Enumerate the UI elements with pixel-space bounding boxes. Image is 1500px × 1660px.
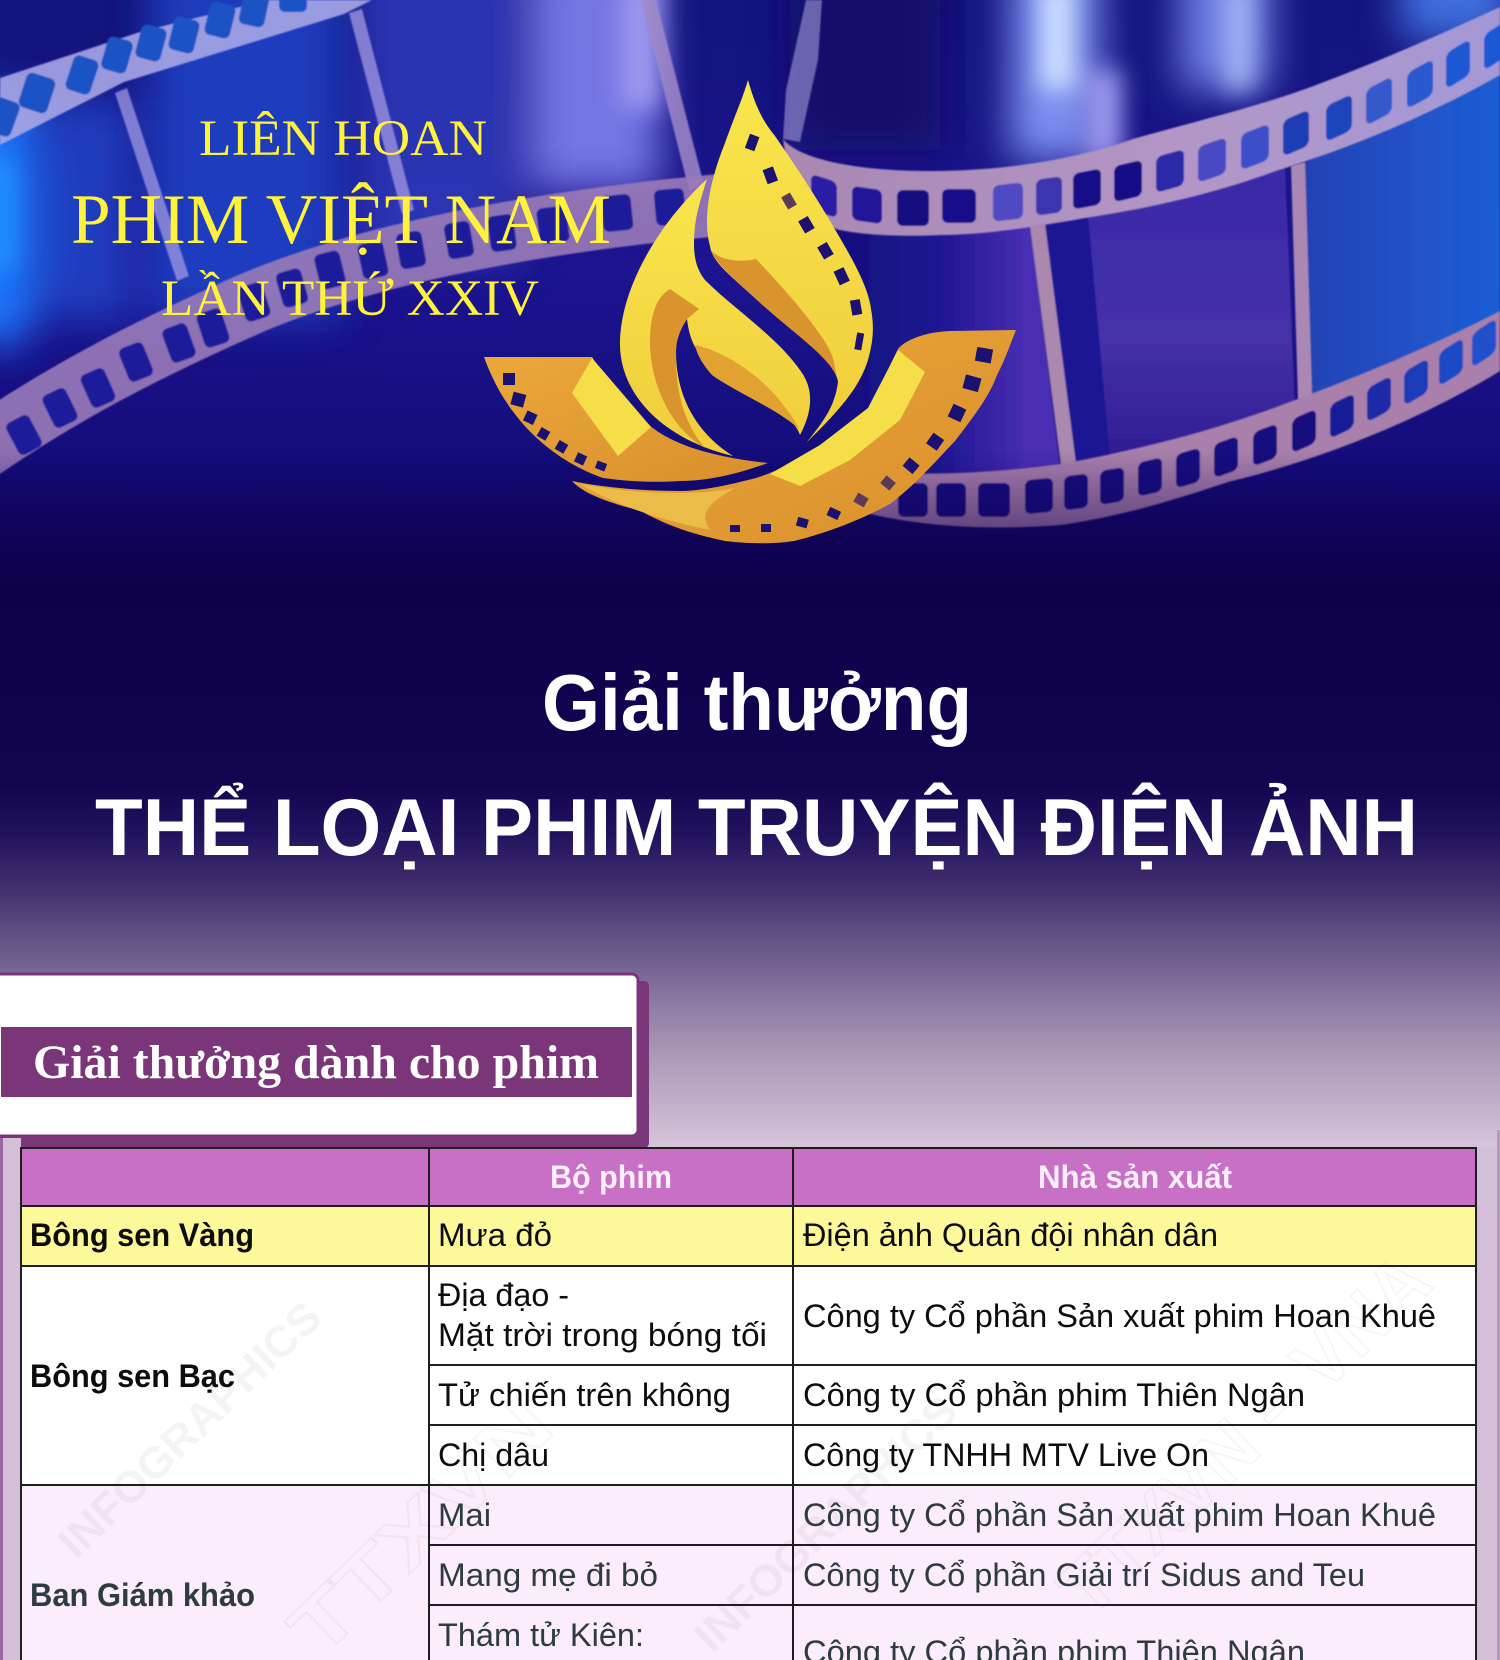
row: Bông sen Vàng: Điện ảnh Quân đội nhân dân: [803, 1217, 1218, 1253]
festival name: PHIM VIỆT NAM: [71, 181, 611, 259]
table header: Nhà sản xuất: [1038, 1159, 1232, 1195]
row: Ban Giám khảo: Ban Giám khảo: [30, 1577, 255, 1613]
row: Bông sen Bạc: Tử chiến trên không: [438, 1377, 731, 1413]
festival name: [71, 111, 611, 327]
centre leaf orange: [695, 345, 800, 430]
right leaf orange band: [711, 250, 838, 382]
row: Bông sen Bạc: Chị dâu: [438, 1437, 549, 1473]
watermark: TTXVN – VNA: [1043, 1238, 1447, 1632]
festival name: LIÊN HOAN: [199, 111, 487, 167]
film strip: right upper band: [783, 7, 1500, 236]
row: Bông sen Vàng: Bông sen Vàng: [30, 1217, 254, 1253]
film strip: left upper band: [0, 0, 372, 145]
right petal: [572, 330, 1016, 543]
side strips: [0, 1130, 1500, 1660]
row: Ban Giám khảo: Mai: [438, 1497, 491, 1533]
row: Bông sen Bạc: Công ty TNHH MTV Live On: [803, 1437, 1209, 1473]
watermark: INFOGRAPHICS: [685, 1386, 967, 1660]
left leaf orange inner: [650, 289, 705, 448]
film strip: curl: [783, 0, 822, 142]
title: THỂ LOẠI PHIM TRUYỆN ĐIỆN ẢNH: [95, 782, 1418, 873]
left petal yellow facet: [572, 358, 651, 456]
row: Ban Giám khảo: Thám tử Kiên:: [438, 1617, 644, 1653]
table header: Bộ phim: [550, 1159, 672, 1195]
icon: golden lotus film logo: [484, 80, 1016, 543]
header bottom fade: [0, 458, 1500, 572]
title: Giải thưởng: [542, 658, 972, 747]
film holes on logo: [503, 134, 993, 532]
row: Bông sen Bạc: Mặt trời trong bóng tối: [438, 1317, 767, 1353]
film strip: right lower band: [860, 311, 1500, 527]
right petal lower highlight: [580, 484, 735, 530]
row: Bông sen Bạc: Địa đạo -: [438, 1277, 569, 1313]
title: [95, 658, 1418, 873]
table header: [550, 1159, 1232, 1195]
left flame and centre leaf: [620, 179, 810, 456]
section banner: [0, 974, 649, 1148]
watermark: [49, 1238, 1447, 1660]
left petal: [484, 357, 768, 482]
grid lines: [21, 1148, 1476, 1660]
right flame leaf: [707, 80, 873, 443]
row: Bông sen Bạc: Bông sen Bạc: [30, 1358, 235, 1394]
header film background: [0, 0, 1500, 548]
film strip: right frames: [836, 70, 1500, 478]
section banner: Giải thưởng dành cho phim: [33, 1036, 599, 1089]
watermark: INFOGRAPHICS: [49, 1292, 331, 1567]
row fills: [21, 1148, 1476, 1660]
row: Bông sen Vàng: Mưa đỏ: [438, 1217, 552, 1253]
row: Bông sen Bạc: Công ty Cổ phần Sản xuất phim Hoan Khuê: [803, 1298, 1436, 1334]
row: Ban Giám khảo: [30, 1497, 1436, 1660]
row: Ban Giám khảo: Mang mẹ đi bỏ: [438, 1557, 658, 1593]
row: Bông sen Bạc: [30, 1277, 1436, 1473]
film strip: left lower band: [0, 188, 720, 457]
film strip: left frames: [115, 0, 704, 281]
right petal yellow facet: [770, 350, 925, 486]
awards table: [21, 1148, 1476, 1660]
row: Bông sen Bạc: Công ty Cổ phần phim Thiên Ngân: [803, 1377, 1305, 1413]
row: Bông sen Vàng: [30, 1217, 1218, 1253]
row: Ban Giám khảo: Công ty Cổ phần Sản xuất phim Hoan Khuê: [803, 1497, 1436, 1533]
festival name: LẦN THỨ XXIV: [161, 270, 539, 327]
row: Ban Giám khảo: Công ty Cổ phần Giải trí Sidus and Teu: [803, 1557, 1365, 1593]
